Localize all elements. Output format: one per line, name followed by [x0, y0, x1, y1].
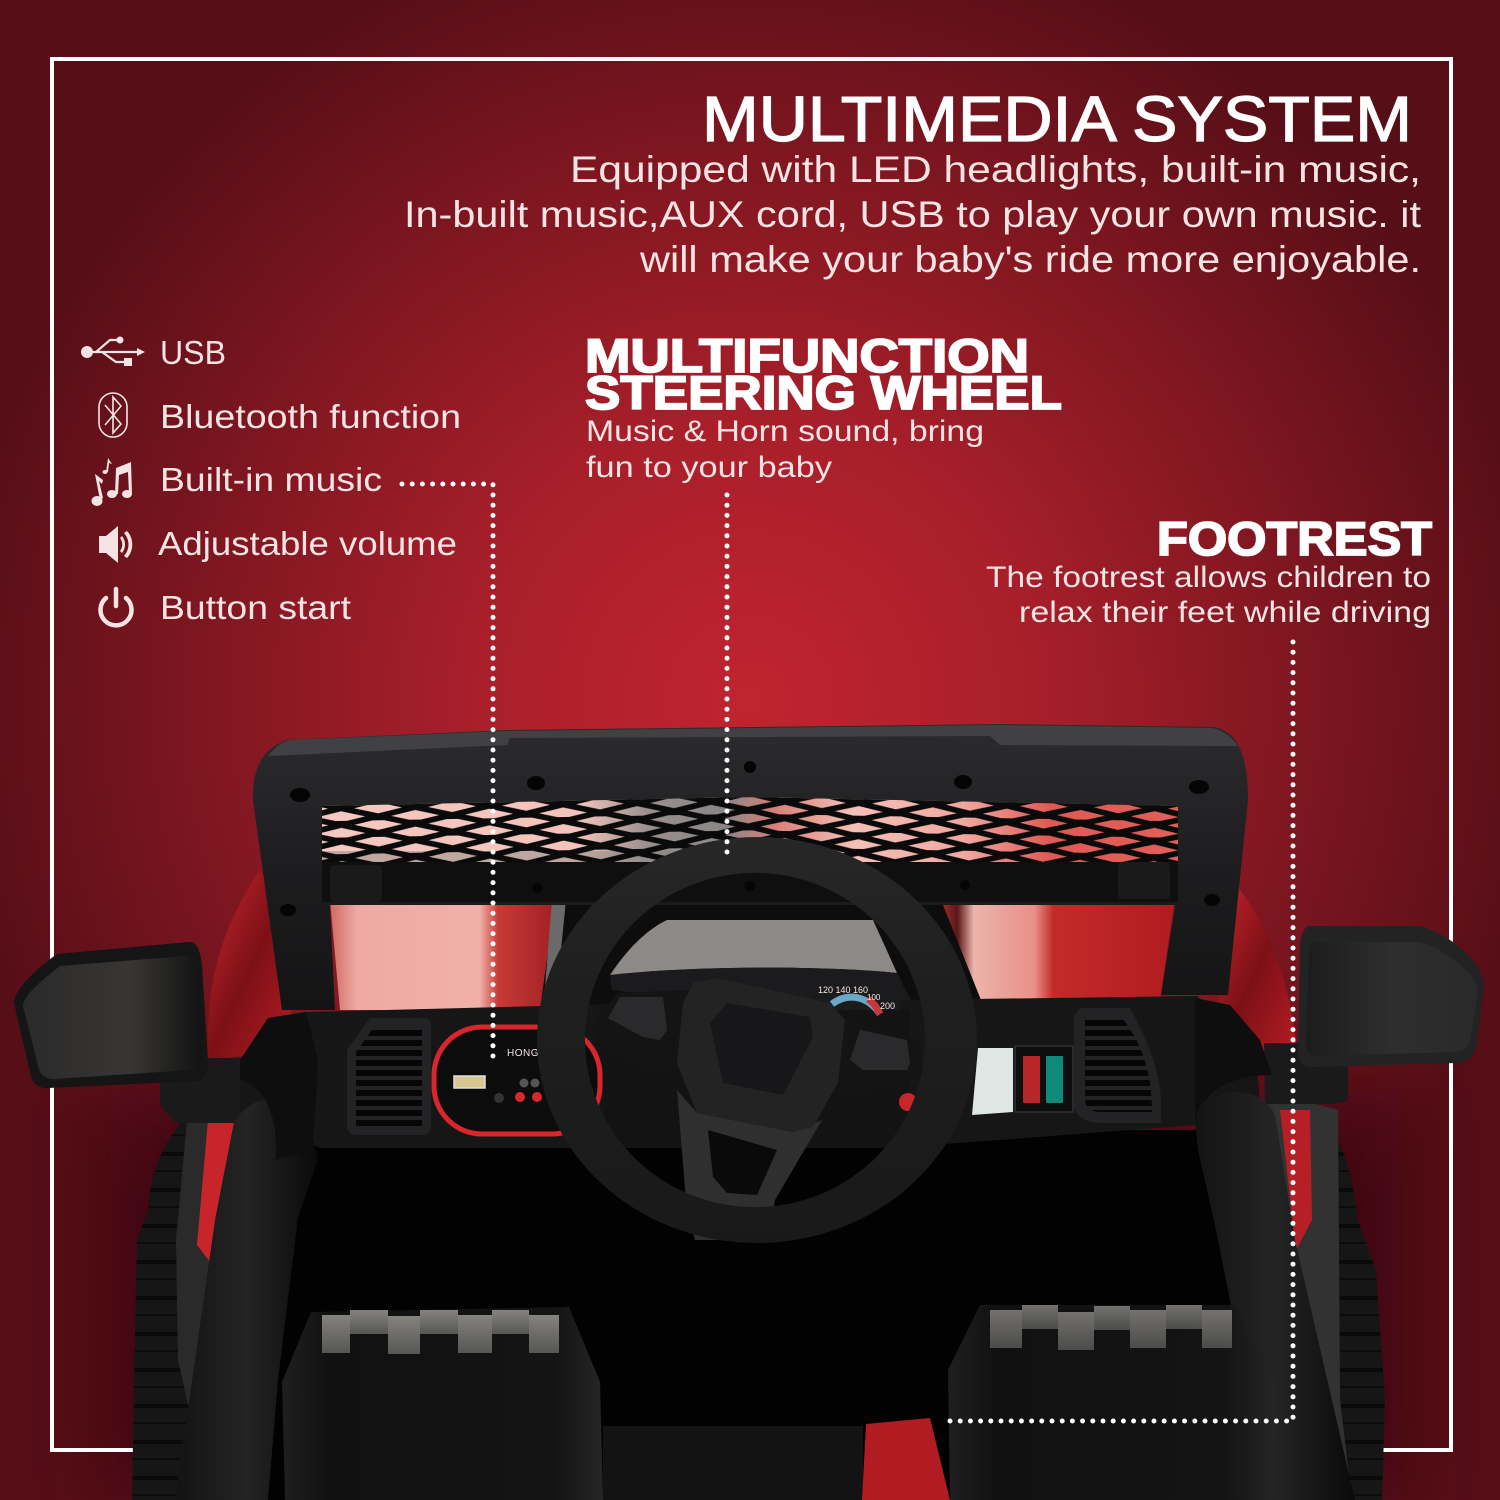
dotted line: built-in music to USB port: [402, 484, 493, 1060]
speedometer red end: [868, 999, 880, 1014]
right spoke: [838, 1020, 922, 1097]
speedometer number: 100: [867, 993, 881, 1002]
left vent: [347, 1018, 431, 1135]
lower cross bar: [322, 862, 1178, 902]
icon: usb: [81, 336, 145, 366]
car shadow: [110, 1090, 1400, 1500]
steering wheel: [537, 837, 977, 1243]
interior black: [210, 1130, 1300, 1500]
right mirror: [1264, 926, 1484, 1104]
text block: steering wheel description: fun to your baby: [586, 451, 832, 484]
right mirror arm: [1264, 1043, 1348, 1104]
right body side: [1260, 1100, 1352, 1500]
label: usb: USB: [160, 334, 226, 371]
icon: music notes: [92, 458, 132, 506]
label: adjustable volume: Adjustable volume: [158, 525, 457, 562]
right pillar collar: [1195, 998, 1272, 1120]
left lower red panel: [197, 1120, 240, 1275]
bar sleeve left: [330, 865, 382, 902]
right seat: [948, 1305, 1275, 1500]
text block: multimedia description: In-built music,AUX cord, USB to play your own music. it: [404, 194, 1422, 235]
red pedal: [862, 1418, 950, 1500]
right tyre: [1300, 1110, 1385, 1500]
roll bar screws: [280, 761, 1220, 916]
left mirror glass: [23, 956, 202, 1079]
icon: volume: [99, 526, 132, 563]
heading: multifunction steering wheel: STEERING WHEEL: [585, 366, 1062, 419]
bar sleeve right: [1118, 862, 1170, 899]
heading: multimedia system: MULTIMEDIA SYSTEM: [702, 83, 1412, 155]
text block: footrest description: [986, 561, 1431, 629]
text block: multimedia description: Equipped with LED headlights, built-in music,: [570, 149, 1421, 190]
heading: footrest: FOOTREST: [1157, 512, 1432, 565]
red start button: [899, 1093, 917, 1111]
dashboard body right: [890, 996, 1260, 1148]
left windshield reflection: [330, 900, 557, 1010]
left seat ridges: [322, 1310, 559, 1354]
usb port: [454, 1076, 485, 1088]
text block: multimedia description: will make your baby's ride more enjoyable.: [639, 239, 1421, 280]
text block: steering wheel description: Music & Horn sound, bring: [586, 415, 984, 448]
left red fender: [208, 872, 295, 1060]
ride-on car photo illustration: [14, 724, 1484, 1500]
right seat ridges: [990, 1305, 1232, 1350]
dash top panel: [540, 900, 985, 1010]
left vent slats: [356, 1027, 422, 1126]
media buttons: [515, 1092, 542, 1102]
green switch: [1046, 1056, 1063, 1103]
dash grey cover: [610, 920, 897, 975]
speedometer arc: [832, 997, 880, 1014]
airbag cover: [710, 1003, 813, 1095]
left mirror: [14, 942, 241, 1123]
left seat base: [282, 1307, 603, 1500]
aux jack: [494, 1093, 504, 1103]
text block: footrest description: The footrest allows children to: [986, 561, 1431, 594]
left tyre: [132, 1118, 200, 1500]
label: button start: Button start: [160, 589, 351, 626]
dashboard body left: [240, 1004, 620, 1148]
roll bar with mesh: [253, 724, 1248, 1010]
heading: multifunction steering wheel: [585, 329, 1062, 419]
lower spoke: [677, 1090, 822, 1240]
glass strip left: [544, 900, 566, 1000]
right windshield reflection: [941, 895, 1175, 1000]
speedometer numbers: 120 140 160: [818, 985, 868, 995]
right control pad: [850, 1030, 910, 1070]
gauge cluster hood: [610, 968, 922, 1030]
right tube pillar: [1195, 1092, 1355, 1500]
left tube pillar: [175, 1098, 318, 1500]
text block: footrest description: relax their feet while driving: [1019, 596, 1431, 629]
feature list: [81, 334, 461, 626]
wheel rim: [537, 837, 977, 1243]
left body side: [176, 1110, 250, 1500]
dashboard centre: [600, 1010, 910, 1148]
switch block: [1015, 1046, 1073, 1112]
map panel: [972, 1048, 1013, 1115]
mesh lattice right: [750, 797, 1178, 862]
dotted line: footrest: [948, 642, 1293, 1421]
mesh lattice left: [322, 797, 750, 862]
red switch: [1023, 1056, 1040, 1103]
heading: multifunction steering wheel: MULTIFUNCTION: [585, 329, 1029, 382]
left spoke: [593, 990, 690, 1072]
indicator lights: [520, 1078, 540, 1088]
right vent: [1074, 1008, 1161, 1123]
text block: steering wheel description: [586, 415, 984, 484]
right mirror housing: [1298, 926, 1484, 1067]
media panel red oval: [434, 1027, 600, 1134]
speedometer number: 200: [880, 1001, 895, 1011]
honghui badge: HONGHUI: [507, 1048, 558, 1059]
label: built-in music: Built-in music: [160, 461, 382, 498]
roll bar frame: [253, 724, 1248, 1010]
lower spoke cutout: [708, 1130, 777, 1195]
dashboard: [210, 985, 1300, 1500]
left mirror arm: [160, 1058, 241, 1123]
wheel hub: [677, 978, 845, 1132]
mesh lower grey row: [322, 851, 700, 864]
center console: [603, 1426, 863, 1500]
icon: bluetooth: [99, 393, 127, 437]
left seat: [282, 1307, 603, 1500]
label: bluetooth function: Bluetooth function: [160, 398, 461, 435]
right red fender: [1215, 880, 1298, 1060]
left mirror housing: [14, 942, 208, 1088]
right seat base: [948, 1305, 1275, 1500]
left pillar collar: [240, 1012, 318, 1160]
roll bar top highlight: [268, 725, 1238, 756]
right mirror glass: [1306, 942, 1478, 1056]
text block: multimedia description: [404, 149, 1422, 280]
left control pad: [608, 997, 667, 1040]
icon: power: [100, 589, 131, 625]
right vent slats: [1085, 1018, 1152, 1112]
right lower red panel: [1280, 1110, 1312, 1250]
mesh backing: [322, 797, 1178, 864]
dotted line: steering wheel: [724, 495, 730, 860]
